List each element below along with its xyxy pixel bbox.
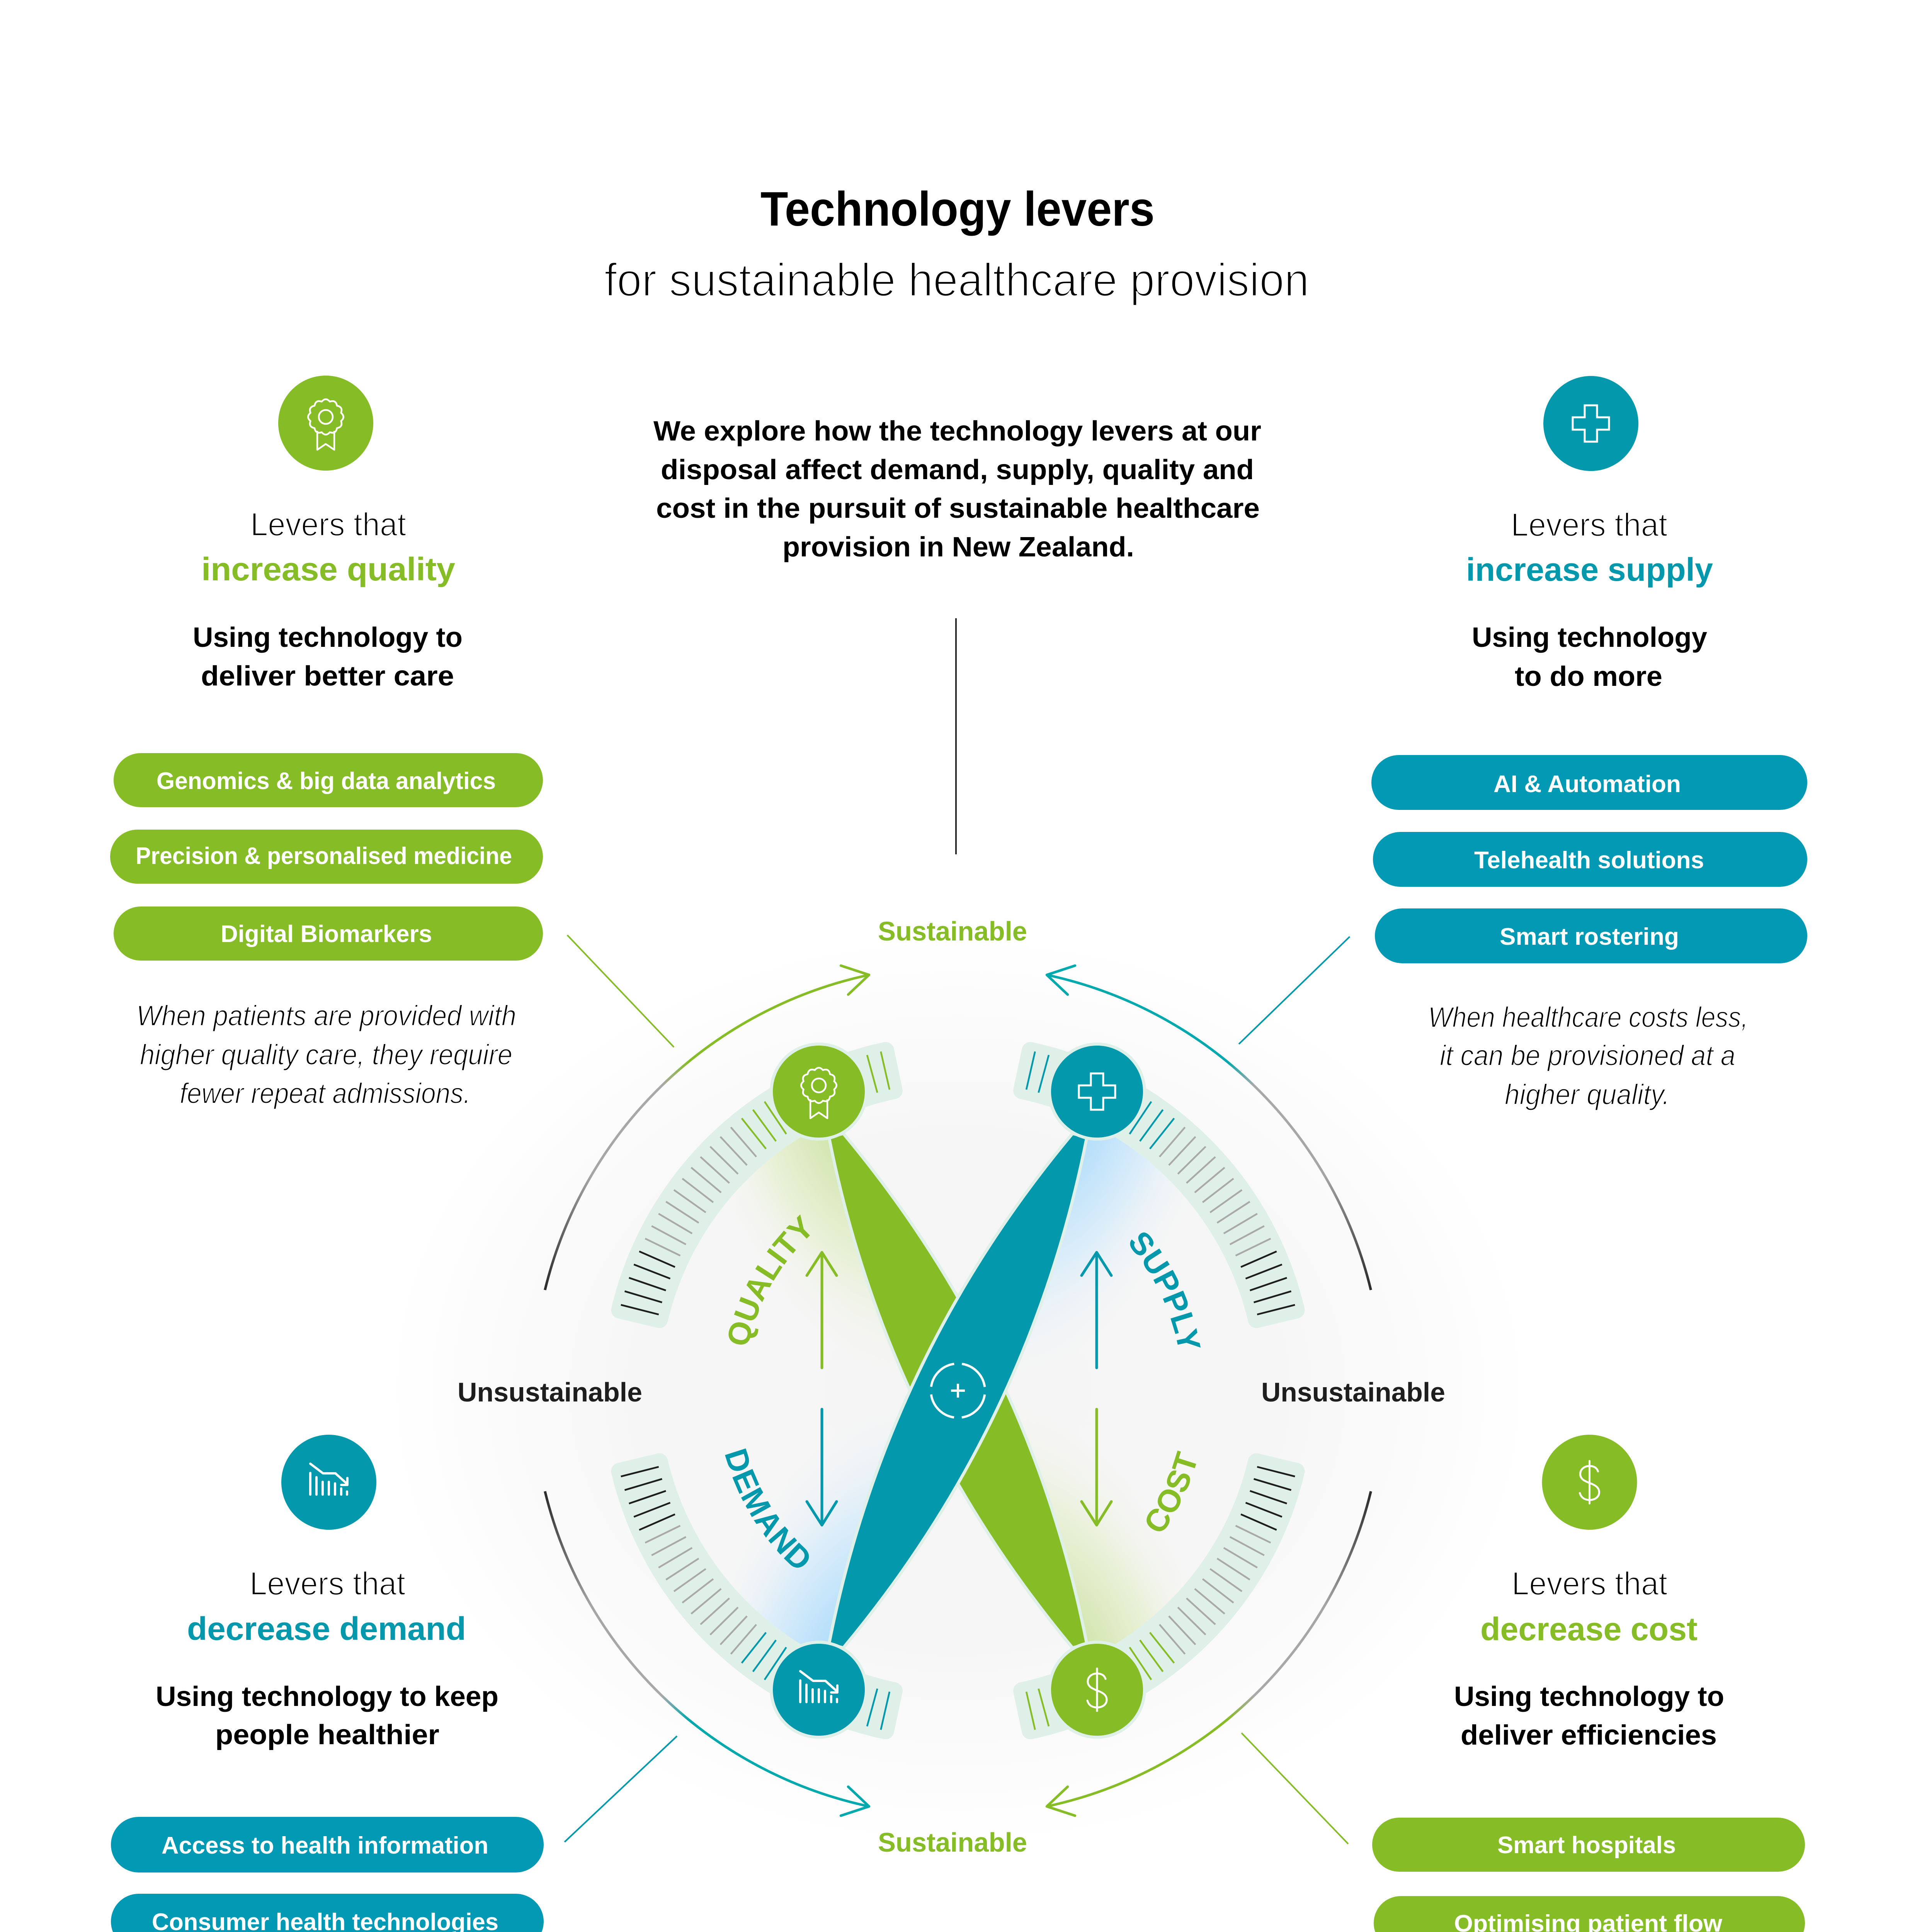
panel: increase supply	[1371, 376, 1807, 1111]
heading: increase supply: Levers that	[1511, 507, 1667, 543]
label: cost: COST	[1137, 1448, 1205, 1540]
pill: patient flow	[1374, 1896, 1805, 1932]
subheading: Using technology to	[193, 622, 463, 653]
title	[604, 182, 1309, 306]
pill: consumer health	[111, 1894, 544, 1932]
heading: increase supply	[1466, 507, 1713, 588]
subheading: Using technology to	[1454, 1681, 1724, 1712]
pill: telehealth: Telehealth solutions	[1474, 847, 1704, 874]
teal lever blade	[831, 1135, 1085, 1646]
description: higher quality care, they require	[140, 1039, 512, 1071]
pill: smart hospitals: Smart hospitals	[1497, 1832, 1676, 1859]
label: sustainable top: Sustainable	[878, 916, 1027, 946]
heading: decrease demand: Levers that	[250, 1565, 405, 1602]
pill: AI and automation: AI & Automation	[1493, 771, 1681, 798]
connector: quality	[567, 935, 674, 1047]
description	[1428, 1001, 1748, 1111]
pill: smart hospitals	[1372, 1818, 1805, 1872]
node: quality	[770, 1043, 868, 1141]
intro text: provision in New Zealand.	[782, 532, 1134, 563]
outer arc arrow: supply	[1047, 966, 1371, 1290]
title: for sustainable healthcare provision	[604, 253, 1309, 306]
gradient wedge: demand	[747, 1462, 879, 1644]
outer arc arrow: demand	[545, 1492, 869, 1816]
icon: dollar	[1542, 1435, 1637, 1530]
background glow	[386, 935, 1530, 1847]
subheading	[1472, 622, 1707, 692]
gradient wedge: cost	[1034, 1455, 1171, 1644]
description: fewer repeat admissions.	[180, 1077, 471, 1109]
description: it can be provisioned at a	[1440, 1039, 1735, 1071]
heading: increase quality	[201, 506, 455, 587]
icon: centre pivot	[931, 1364, 985, 1418]
pill: precision medicine	[110, 830, 543, 884]
label: supply: SUPPLY	[1121, 1225, 1207, 1354]
gauge band: quality	[620, 1051, 894, 1320]
pill: health information: Access to health information	[162, 1832, 488, 1859]
gauge band: cost	[1022, 1462, 1296, 1731]
panel: decrease demand	[111, 1435, 544, 1932]
pill: genomics: Genomics & big data analytics	[156, 768, 496, 794]
title: Technology levers	[760, 182, 1155, 236]
subheading	[193, 622, 463, 692]
description: When patients are provided with	[136, 1000, 516, 1032]
subheading: to do more	[1515, 661, 1662, 692]
node: supply	[1048, 1043, 1146, 1141]
vertical connector from intro to diagram	[955, 618, 957, 854]
pill: telehealth	[1373, 832, 1807, 887]
outer arc arrow: cost	[1047, 1492, 1371, 1816]
outer arc arrow: quality	[545, 966, 869, 1290]
diagram: lever dial	[458, 916, 1445, 1857]
description: higher quality.	[1505, 1078, 1670, 1111]
subheading: Using technology to keep	[156, 1681, 498, 1712]
connector: supply	[1239, 937, 1350, 1044]
label: unsustainable right: Unsustainable	[1261, 1377, 1445, 1407]
arrow: supply up	[1082, 1252, 1111, 1368]
subheading: people healthier	[215, 1719, 439, 1750]
description: When healthcare costs less,	[1428, 1001, 1748, 1033]
heading: decrease demand: decrease demand	[187, 1611, 466, 1647]
label: sustainable bottom: Sustainable	[878, 1827, 1027, 1857]
heading: increase quality: Levers that	[250, 506, 406, 543]
node: demand	[770, 1641, 868, 1739]
green lever blade	[831, 1135, 1085, 1646]
subheading: deliver better care	[201, 661, 454, 692]
pill: AI and automation	[1371, 755, 1807, 810]
subheading	[156, 1681, 498, 1750]
heading: decrease demand	[187, 1565, 466, 1647]
pill: health information	[111, 1817, 544, 1872]
pill: precision medicine: Precision & personalised medicine	[136, 843, 512, 869]
heading: decrease cost	[1480, 1565, 1698, 1647]
heading: decrease cost: decrease cost	[1480, 1611, 1698, 1647]
icon: falling chart	[281, 1435, 376, 1530]
arrow: cost down	[1082, 1409, 1111, 1525]
heading: decrease cost: Levers that	[1512, 1565, 1667, 1602]
heading: increase supply: increase supply	[1466, 551, 1713, 588]
icon: rosette	[278, 376, 373, 471]
label: quality: QUALITY	[720, 1209, 821, 1350]
gauge band: demand	[620, 1462, 894, 1731]
pill: digital biomarkers: Digital Biomarkers	[221, 921, 432, 947]
pill: smart rostering: Smart rostering	[1500, 923, 1679, 950]
pill: smart rostering	[1375, 908, 1807, 963]
subheading: Using technology	[1472, 622, 1707, 653]
panel: increase quality	[110, 376, 543, 1109]
icon: medical cross	[1543, 376, 1638, 471]
intro text: disposal affect demand, supply, quality and	[661, 454, 1254, 485]
pill: digital biomarkers	[114, 906, 543, 961]
panel: decrease cost	[1372, 1435, 1807, 1932]
gradient wedge: supply	[1037, 1137, 1169, 1320]
subheading: deliver efficiencies	[1461, 1720, 1717, 1751]
node: cost	[1048, 1641, 1146, 1739]
intro text: cost in the pursuit of sustainable healthcare	[656, 493, 1260, 524]
arrow: quality up	[807, 1252, 837, 1368]
connector: cost	[1242, 1733, 1348, 1844]
intro text: We explore how the technology levers at our	[653, 416, 1261, 447]
description	[136, 1000, 516, 1109]
gradient wedge: quality	[745, 1137, 881, 1326]
label: unsustainable left: Unsustainable	[458, 1377, 642, 1407]
connector: demand	[565, 1736, 677, 1842]
intro text	[653, 416, 1261, 563]
label: demand: DEMAND	[718, 1444, 819, 1578]
gauge band: supply	[1022, 1051, 1296, 1320]
pill: genomics	[114, 753, 543, 807]
heading: increase quality: increase quality	[201, 551, 455, 587]
subheading	[1454, 1681, 1724, 1751]
arrow: demand down	[807, 1409, 837, 1525]
